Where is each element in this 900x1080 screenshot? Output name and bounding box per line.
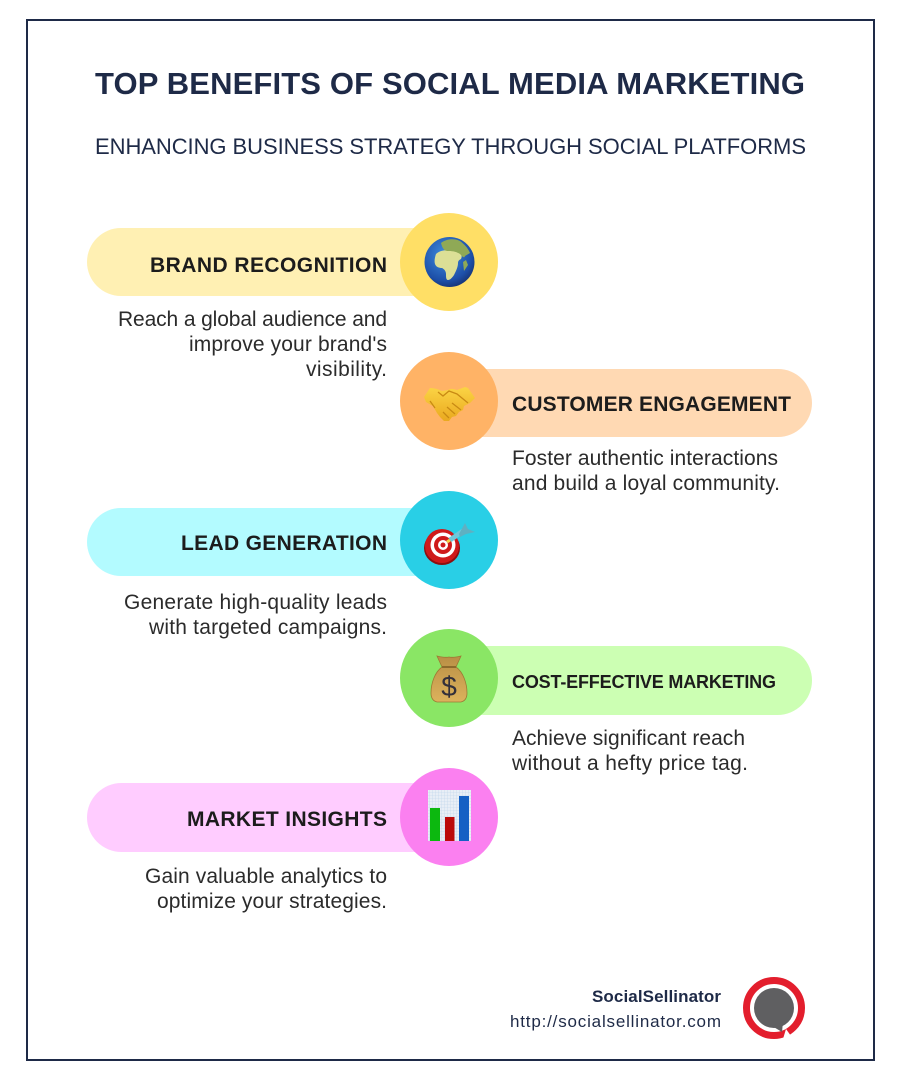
text: cost-effective marketing description: Achieve significant reach <box>512 727 745 750</box>
pill: brand recognition <box>87 228 449 296</box>
text: market insights description: Gain valuable analytics to <box>145 865 387 888</box>
circle: market insights <box>400 768 498 866</box>
text: market insights description: optimize your strategies. <box>157 890 387 913</box>
icon: bar chart <box>428 790 471 841</box>
pill: cost-effective marketing <box>449 646 812 715</box>
panel: customer engagement <box>400 352 812 495</box>
panel: market insights <box>87 768 498 913</box>
icon: money bag: $ <box>441 671 457 702</box>
text: cost-effective marketing description <box>511 727 748 775</box>
title: TOP BENEFITS OF SOCIAL MEDIA MARKETING <box>95 66 805 101</box>
text: brand recognition description: improve your brand's <box>189 333 387 356</box>
icon: handshake <box>424 387 475 421</box>
text: lead generation description <box>124 591 387 639</box>
footer brand name: SocialSellinator <box>592 987 721 1006</box>
text: market insights description <box>145 865 387 913</box>
footer url: http://socialsellinator.com <box>510 1012 721 1031</box>
text: customer engagement description <box>512 447 780 495</box>
icon: money bag <box>431 656 467 702</box>
circle: lead generation <box>400 491 498 589</box>
subtitle: ENHANCING BUSINESS STRATEGY THROUGH SOCIAL PLATFORMS <box>95 134 806 159</box>
text: lead generation description: Generate high-quality leads <box>124 591 387 614</box>
text: customer engagement description: and build a loyal community. <box>512 472 780 495</box>
circle: cost-effective marketing <box>400 629 498 727</box>
pill: lead generation <box>87 508 449 576</box>
text: lead generation description: with targeted campaigns. <box>148 616 387 639</box>
pill: customer engagement <box>449 369 812 437</box>
pill: market insights <box>87 783 449 852</box>
panel: lead generation <box>87 491 498 639</box>
text: cost-effective marketing description: without a hefty price tag. <box>511 752 748 775</box>
heading: market insights: MARKET INSIGHTS <box>187 808 387 831</box>
text: brand recognition description: visibility. <box>306 358 387 381</box>
heading: brand recognition: BRAND RECOGNITION <box>150 254 387 277</box>
text: brand recognition description: Reach a global audience and <box>118 308 387 331</box>
panel: cost-effective marketing <box>400 629 812 775</box>
heading: customer engagement: CUSTOMER ENGAGEMENT <box>512 393 791 416</box>
heading: cost-effective marketing: COST-EFFECTIVE MARKETING <box>512 672 776 692</box>
text: brand recognition description <box>118 308 387 381</box>
heading: lead generation: LEAD GENERATION <box>181 532 387 555</box>
icon: dart target <box>424 523 475 565</box>
text: customer engagement description: Foster authentic interactions <box>512 447 778 470</box>
icon: globe <box>424 237 474 287</box>
circle: customer engagement <box>400 352 498 450</box>
icon: SocialSellinator logo <box>746 980 802 1039</box>
circle: brand recognition <box>400 213 498 311</box>
panel: brand recognition <box>87 213 498 381</box>
